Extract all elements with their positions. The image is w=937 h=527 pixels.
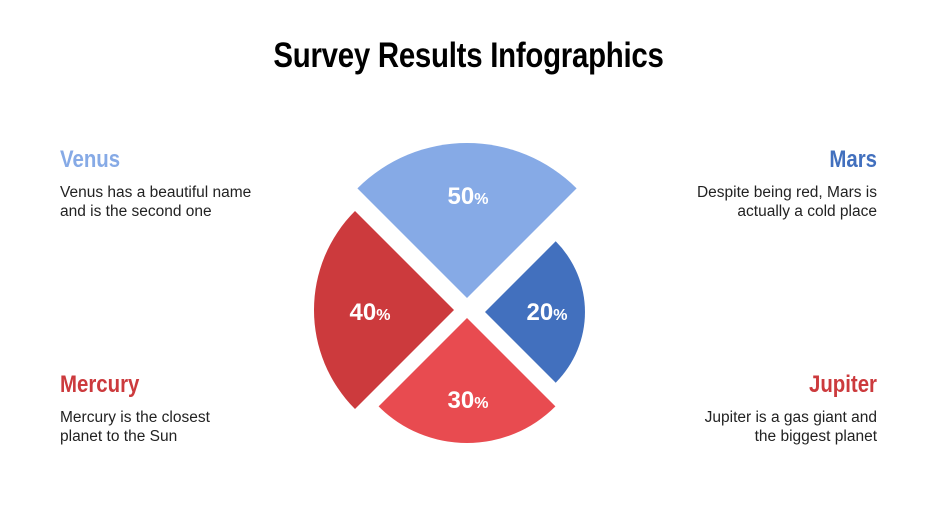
wedge: 20%: 20% — [527, 299, 567, 326]
text: venus: Venus — [60, 146, 120, 173]
text: mercury — [60, 371, 210, 445]
text: venus — [60, 146, 251, 220]
wedge: 20% — [485, 241, 585, 383]
text: mercury: Mercury is the closest — [60, 409, 210, 426]
title: Survey Results Infographics — [273, 36, 664, 75]
text: jupiter: Jupiter — [809, 371, 877, 398]
wedge: 30%: 30% — [448, 387, 488, 414]
wedge: 50%: 50% — [448, 183, 488, 210]
text: mars: Mars — [829, 146, 877, 173]
wedge: 40%: 40% — [350, 299, 390, 326]
wedge: 50% — [357, 143, 577, 298]
wedge: 30% — [379, 318, 555, 443]
text: mercury: planet to the Sun — [60, 428, 177, 445]
text: venus: Venus has a beautiful name — [60, 184, 251, 201]
text: mars: actually a cold place — [737, 203, 877, 220]
wedge: 40% — [314, 211, 454, 409]
text: jupiter: the biggest planet — [755, 428, 877, 445]
text: jupiter: Jupiter is a gas giant and — [705, 409, 877, 426]
text: mercury: Mercury — [60, 371, 139, 398]
text: mars — [697, 146, 877, 220]
text: mars: Despite being red, Mars is — [697, 184, 877, 201]
text: venus: and is the second one — [60, 203, 212, 220]
text: jupiter — [704, 371, 877, 445]
